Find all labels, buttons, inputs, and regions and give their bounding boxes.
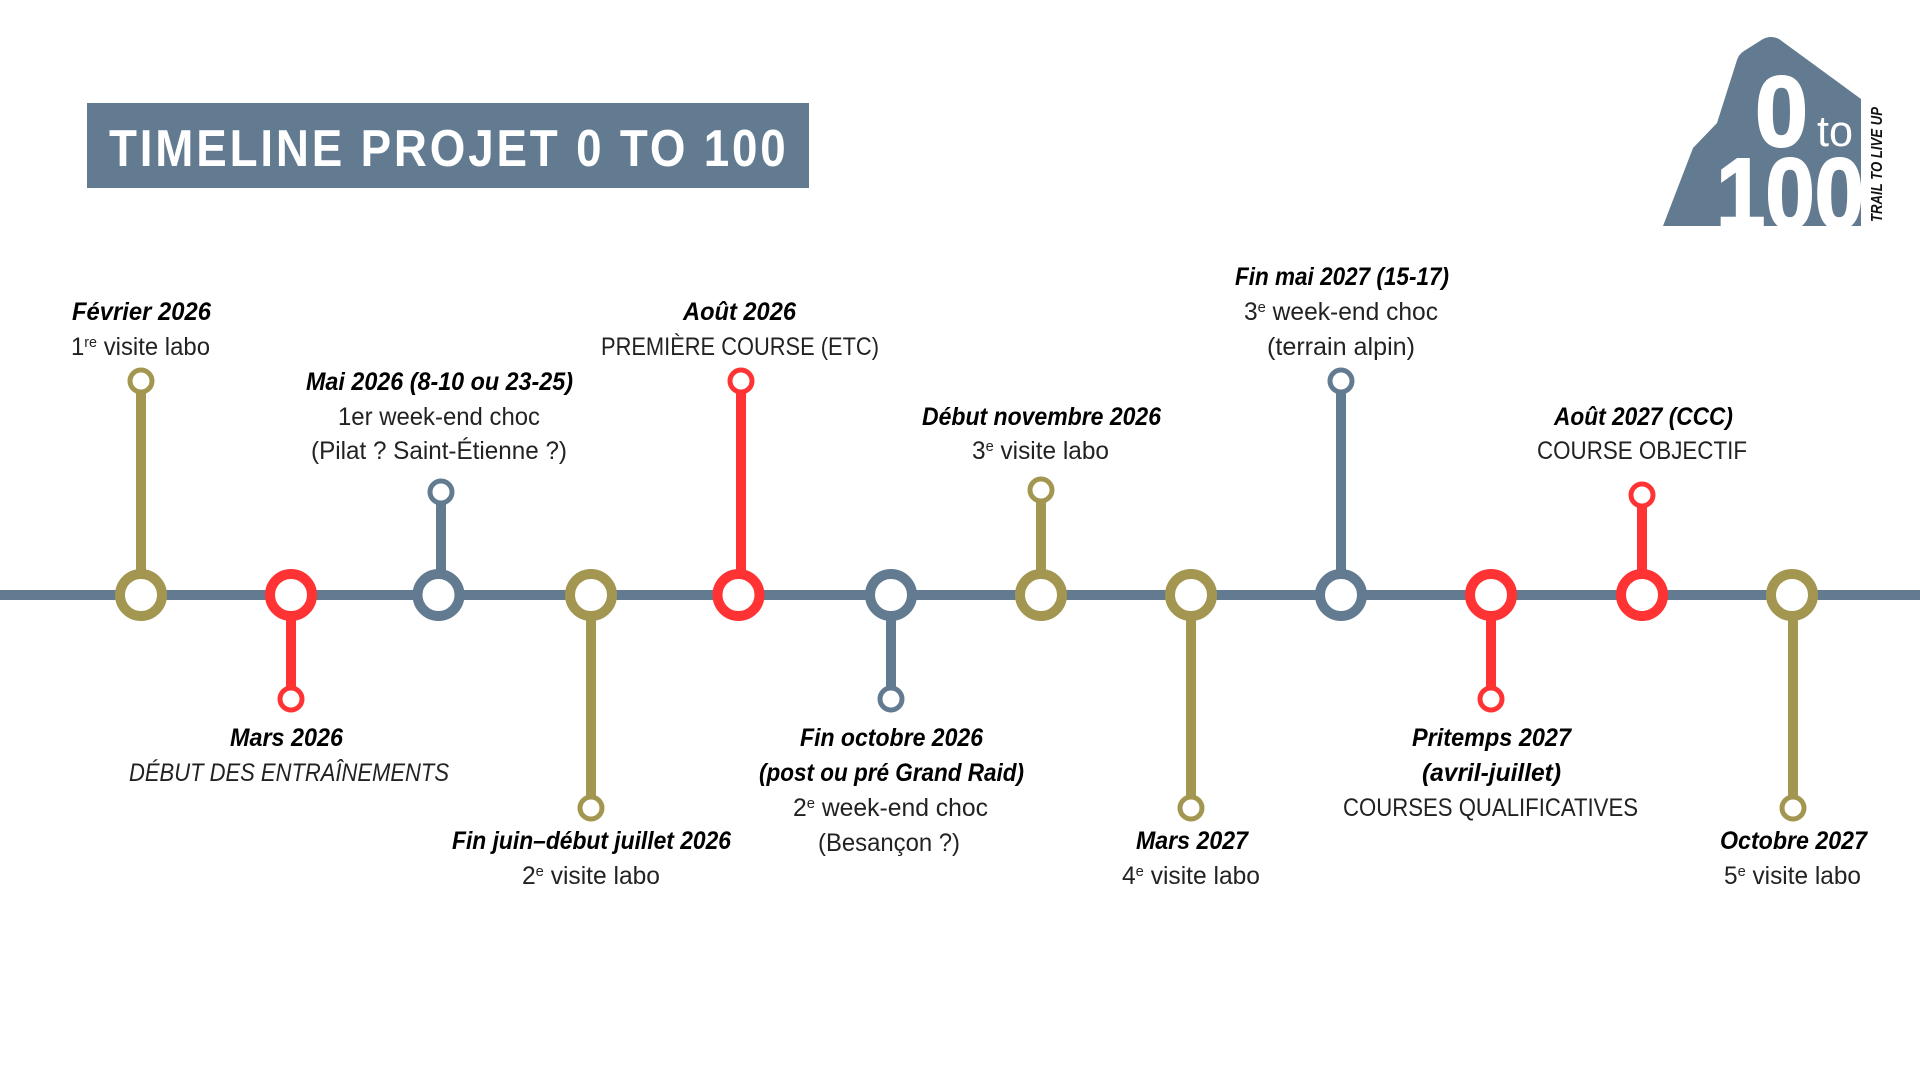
milestone: Février 2026: 1 [71,333,85,361]
milestone: Fin mai 2027: Fin mai 2027 (15-17) [1235,263,1449,291]
milestone: Début novembre 2026: 3 [972,437,986,465]
milestone: Août 2026 [601,298,879,616]
milestone: Février 2026: Février 2026 [72,298,212,326]
milestone: Fin juin–début juillet 2026 [452,574,732,890]
milestone: Fin juin–début juillet 2026: e [536,863,544,880]
milestone: Août 2026: PREMIÈRE COURSE (ETC) [601,332,879,361]
milestone: Pritemps 2027 [1343,574,1638,822]
milestone: Février 2026: re [84,334,97,351]
milestone: Mai 2026: (Pilat ? Saint-Étienne ?) [311,436,567,465]
milestone: Mai 2026 [306,368,573,616]
milestone: Fin mai 2027: week-end choc [1266,298,1438,326]
milestone: Mars 2026: DÉBUT DES ENTRAÎNEMENTS [129,758,449,787]
milestone: Début novembre 2026: Début novembre 2026 [922,403,1162,431]
milestone: Octobre 2027: Octobre 2027 [1720,827,1868,855]
logo tagline: TRAIL TO LIVE UP [1869,107,1886,222]
milestone: Fin octobre 2026: week-end choc [815,794,988,822]
logo digit 0: 0 [1755,56,1808,168]
milestone: Pritemps 2027: COURSES QUALIFICATIVES [1343,794,1638,822]
milestone: Fin octobre 2026: 2 [793,794,807,822]
milestone: Fin mai 2027: (terrain alpin) [1267,333,1415,361]
milestone: Mars 2027 [1122,574,1260,890]
milestone: Mars 2026 [129,574,449,787]
milestone: Début novembre 2026 [922,403,1162,616]
milestone: Fin octobre 2026: e [807,795,815,812]
milestone: Février 2026 [71,298,212,616]
milestone: Début novembre 2026: visite labo [994,437,1109,465]
milestone: Mars 2027: Mars 2027 [1136,827,1249,855]
milestone: Mai 2026: 1er week-end choc [338,403,540,431]
title: TIMELINE PROJET 0 TO 100 [109,120,786,178]
milestone: Fin octobre 2026: (Besançon ?) [818,829,960,857]
milestone: Fin octobre 2026: Fin octobre 2026 [800,724,984,752]
milestone: Début novembre 2026: e [986,438,994,455]
milestone: Octobre 2027: e [1738,863,1746,880]
milestone: Août 2027 (CCC): Août 2027 (CCC) [1553,403,1733,431]
title banner [87,103,809,188]
milestone: Fin octobre 2026: (post ou pré Grand Raid) [759,759,1024,787]
logo number 100: 100 [1716,138,1864,250]
milestone: Octobre 2027: visite labo [1746,862,1861,890]
milestone: Février 2026: visite labo [97,333,210,361]
milestone: Août 2026: Août 2026 [682,298,797,326]
logo: 0 to 100 mountain [1663,37,1882,226]
milestone: Mars 2027: e [1136,863,1144,880]
milestone: Pritemps 2027: Pritemps 2027 [1412,724,1572,752]
main timeline axis [0,590,1920,600]
milestone: Fin mai 2027: e [1258,299,1266,316]
milestone: Août 2027 (CCC) [1537,403,1747,616]
milestone: Octobre 2027: 5 [1724,862,1738,890]
milestone: Fin octobre 2026 [759,574,1024,857]
milestone: Fin mai 2027 [1235,263,1449,616]
milestone: Pritemps 2027: (avril-juillet) [1422,759,1561,787]
milestone: Mai 2026: Mai 2026 (8-10 ou 23-25) [306,368,573,396]
logo word to: to [1817,107,1853,156]
milestone: Fin juin–début juillet 2026: Fin juin–début juillet 2026 [452,827,732,855]
milestone: Mars 2027: visite labo [1144,862,1260,890]
milestone: Août 2027 (CCC): COURSE OBJECTIF [1537,437,1747,465]
milestone: Octobre 2027 [1720,574,1868,890]
milestone: Mars 2027: 4 [1122,862,1136,890]
milestone: Fin mai 2027: 3 [1244,298,1258,326]
milestone: Fin juin–début juillet 2026: visite labo [544,862,660,890]
milestone: Fin juin–début juillet 2026: 2 [522,862,536,890]
milestone: Mars 2026: Mars 2026 [230,724,344,752]
